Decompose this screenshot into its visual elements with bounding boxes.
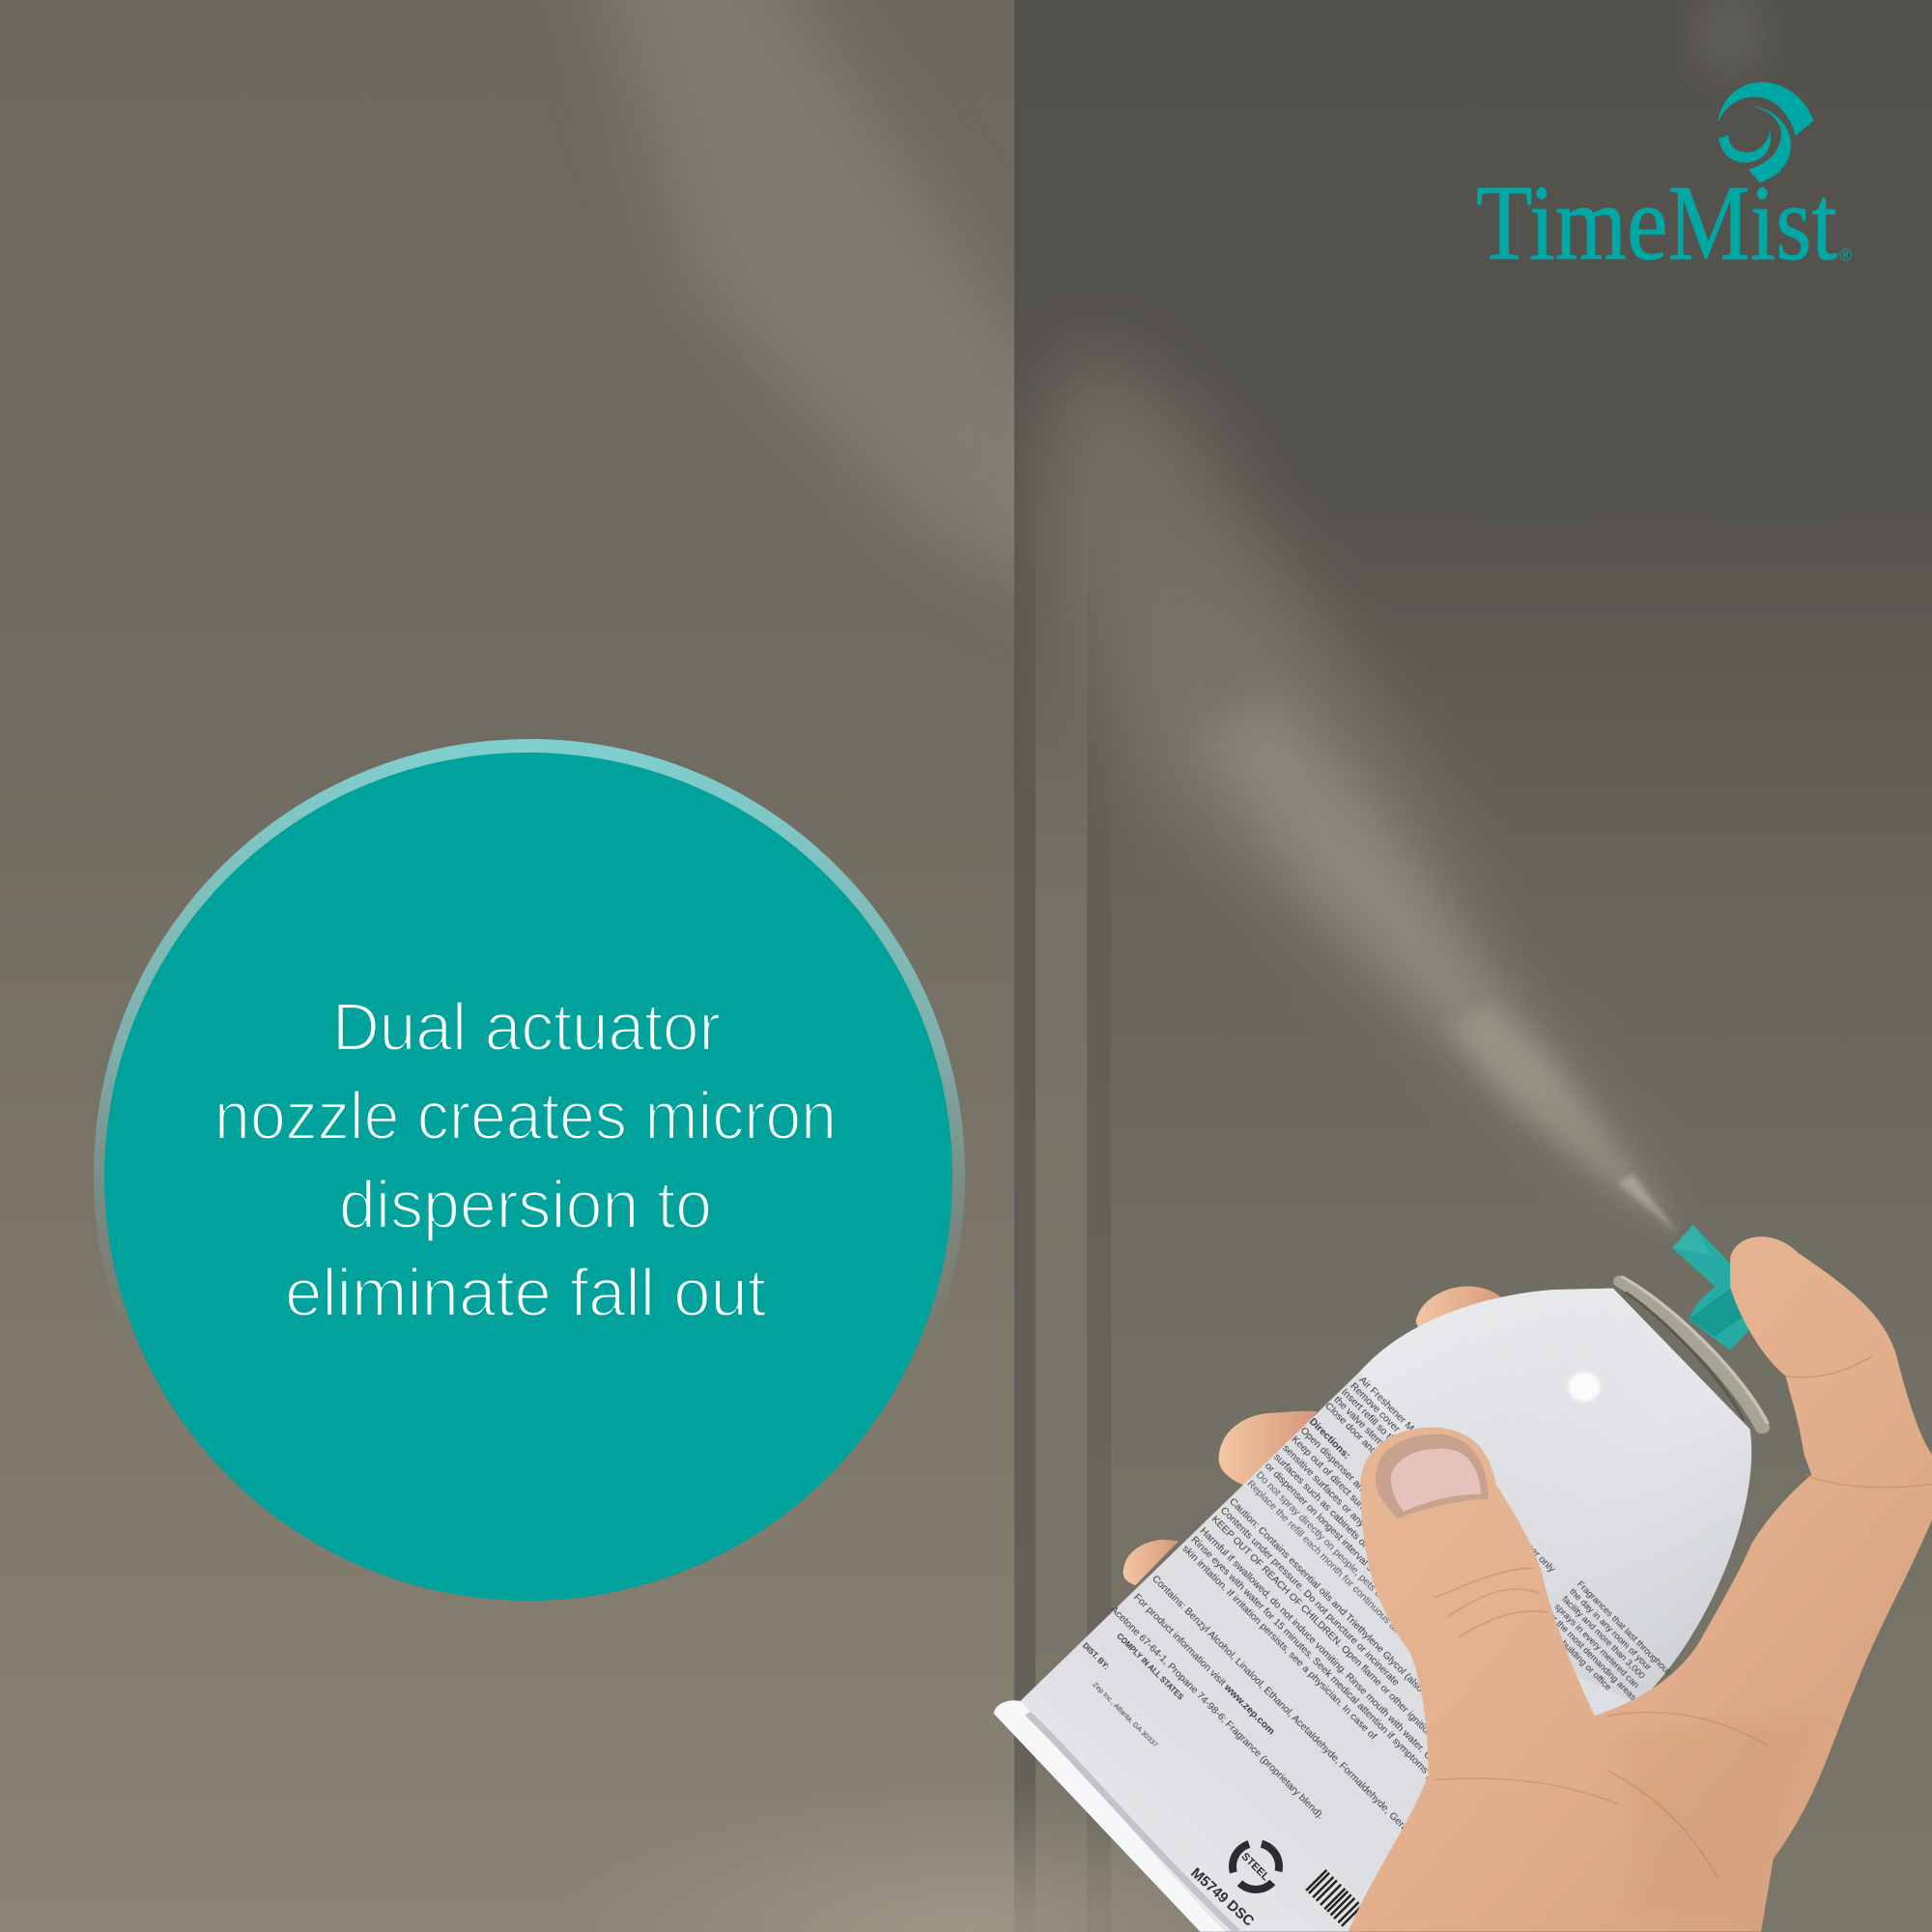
callout text: dispersion to — [339, 1167, 712, 1242]
can highlight — [1568, 1372, 1601, 1402]
can label text: Close door and turn the unit on and set the interval — [1322, 1400, 1492, 1570]
can label text: skin irritation. If irritation persists, see a physician. In case of — [1179, 1543, 1379, 1742]
can base shadow — [1028, 1714, 1237, 1932]
can label text: or dispenser on longest interval setting in small rooms. — [1263, 1461, 1443, 1641]
can label text: Acetone 67-64-1, Propane 74-98-6; Fragrance (proprietary blend). — [1108, 1604, 1326, 1822]
can body — [994, 1289, 1751, 1932]
thumb, palm and index finger — [1349, 1236, 1932, 1932]
can label text: Caution: Contains essential oils and Triethylene Glycol (also known as 2,2' — [1227, 1495, 1471, 1740]
can label text: the day in any room of your — [1567, 1586, 1653, 1673]
can label text: Harmful if swallowed, do not induce vomiting. Rinse mouth with water. Contact a physician — [1198, 1525, 1492, 1820]
metal rim — [1621, 1281, 1762, 1428]
thumb nail — [1376, 1434, 1489, 1519]
circle teal fill — [104, 753, 952, 1601]
can label text: Open dispenser and insert refill. Do not use on wood or — [1298, 1425, 1482, 1608]
nozzle actuator — [1672, 1225, 1749, 1350]
can label text: Zep Inc., Atlanta, GA 30337 — [1091, 1680, 1160, 1749]
can label text: sprays in every metered can — [1552, 1602, 1641, 1690]
can label text: surfaces such as cabinets or dispenser on longest interval setting. — [1271, 1451, 1489, 1669]
recycling mark: STEEL — [1239, 1851, 1271, 1884]
can label text: of your building or office — [1537, 1617, 1613, 1693]
can label text: Do not spray directly on people, pets or fabrics at any time. — [1254, 1469, 1449, 1664]
callout text: nozzle creates micron — [214, 1078, 837, 1153]
logo swirl icon — [1718, 82, 1813, 183]
can label text: Keep out of direct sunlight. 3 feet from vents, shelves or — [1289, 1434, 1475, 1619]
can label text: for the most demanding areas — [1545, 1609, 1638, 1703]
skin creases — [1435, 1356, 1932, 1879]
can label text: Replace the refill each month for continuous air freshening. — [1244, 1478, 1440, 1673]
can, nozzle and background fingers — [994, 1225, 1767, 1932]
barcode — [1306, 1870, 1362, 1926]
can label text: KEEP OUT OF REACH OF CHILDREN. Open flame or other ignition sources — [1209, 1514, 1463, 1767]
can label text: COMPLY IN ALL STATES — [1115, 1632, 1185, 1702]
can label text: Remove cover and insert refill into the dispenser unit — [1348, 1380, 1523, 1555]
can label text: For product information visit www.zep.com — [1131, 1591, 1277, 1737]
callout text: eliminate fall out — [285, 1255, 766, 1330]
can base lip — [994, 1700, 1225, 1932]
can label text: Air Freshener Metered Aerosol refill for use in dispenser only — [1356, 1375, 1558, 1576]
hand holding spray can — [994, 1225, 1932, 1932]
fingers behind can — [1123, 1286, 1508, 1585]
can label text — [1082, 1378, 1670, 1830]
can label text: Rinse eyes with water for 15 minutes. Seek medical attention if symptoms persist. — [1189, 1534, 1456, 1802]
can label text: Insert refill so that valve stem faces the opening — [1339, 1386, 1499, 1547]
registered mark: ® — [1839, 245, 1852, 265]
can label text: Contains: Benzyl Alcohol, Linalool, Ethanol, Acetaldehyde, Formaldehyde, Geraniol — [1150, 1573, 1422, 1845]
recycling mark — [1229, 1839, 1283, 1893]
product code: M5749 DSC — [1187, 1864, 1258, 1930]
can label text: DIST. BY: — [1081, 1641, 1111, 1671]
spray mist plume — [1024, 338, 1679, 1235]
circle outer ring — [94, 739, 965, 1610]
can label text: Directions: — [1307, 1416, 1352, 1462]
callout text — [214, 989, 837, 1330]
can label text: Contents under pressure. Do not puncture or incinerate — [1218, 1505, 1402, 1689]
palm shadow — [1619, 1711, 1829, 1918]
can label text: facility and more than 3,000 — [1559, 1594, 1647, 1682]
can label text: Fragrances that last throughout — [1575, 1579, 1672, 1677]
logo wordmark: TimeMist — [1476, 164, 1837, 283]
can label text: the valve stem faces the opening of the unit — [1331, 1394, 1478, 1541]
can label text: sensitive surfaces or any other objects. Set on longest — [1280, 1442, 1461, 1623]
logo: TimeMist — [1476, 82, 1852, 283]
callout text: Dual actuator — [332, 989, 721, 1065]
callout circle — [94, 739, 965, 1610]
